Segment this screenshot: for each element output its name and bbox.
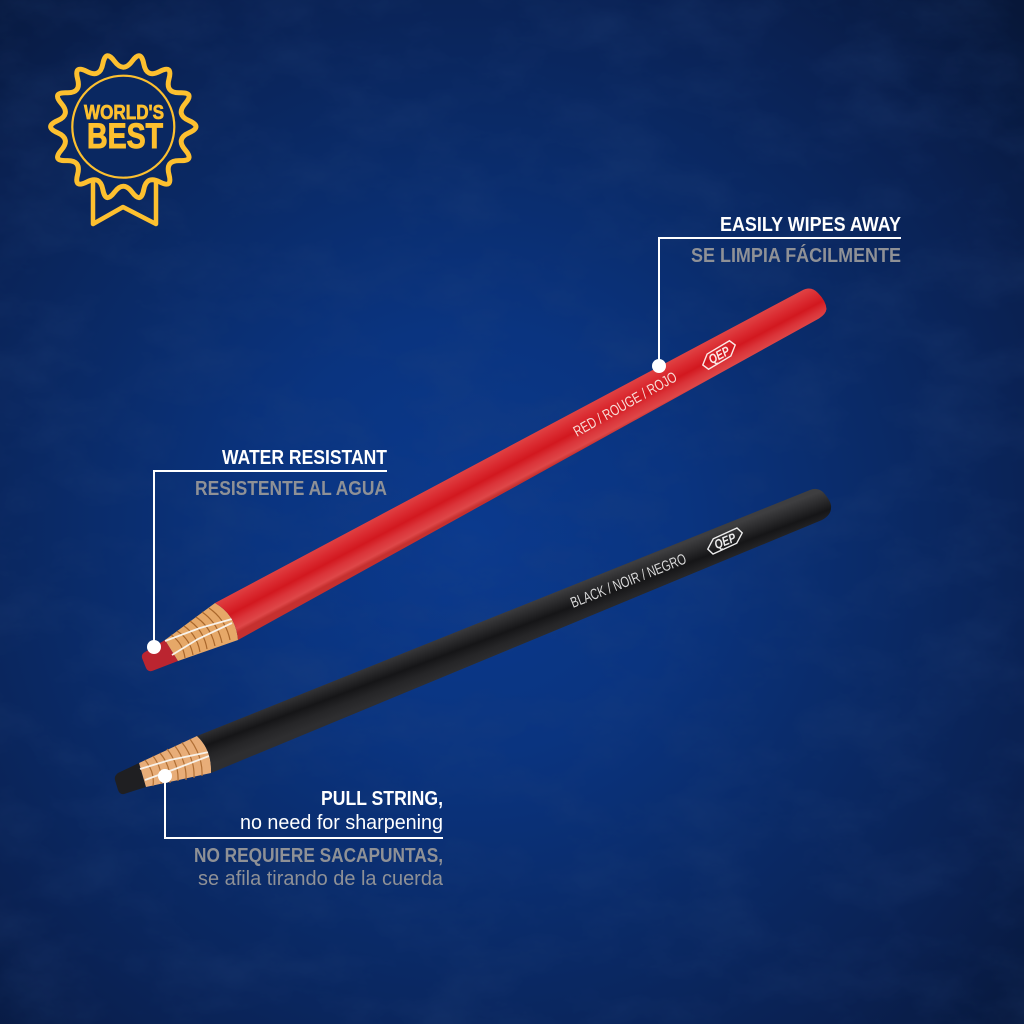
callout dot bbox=[158, 769, 172, 783]
callout subheading: no need for sharpening bbox=[240, 812, 443, 834]
callout leader bbox=[659, 238, 901, 366]
callout: water resistant bbox=[147, 446, 387, 654]
badge text: world's: WORLD'S bbox=[84, 102, 164, 124]
red body bbox=[215, 288, 826, 640]
black pencil label: BLACK / NOIR / NEGRO bbox=[568, 551, 689, 612]
callout heading: WATER RESISTANT bbox=[222, 446, 387, 469]
callout heading: PULL STRING, bbox=[321, 787, 443, 810]
pencil: black bbox=[115, 489, 831, 794]
badge ribbon bbox=[93, 178, 156, 224]
callout dot bbox=[652, 359, 666, 373]
black cone scallops bbox=[145, 739, 202, 786]
badge: world's best bbox=[51, 56, 196, 224]
black lead tip bbox=[115, 763, 146, 794]
callout spanish heading: NO REQUIERE SACAPUNTAS, bbox=[194, 844, 443, 867]
red cone scallops bbox=[171, 608, 230, 658]
black wrapped paper cone bbox=[139, 736, 211, 787]
black pull string bbox=[140, 752, 209, 780]
red wrapped paper cone bbox=[165, 603, 238, 661]
callout leader bbox=[154, 471, 387, 647]
badge inner circle bbox=[72, 76, 174, 178]
callout dot bbox=[147, 640, 161, 654]
pencil: red bbox=[142, 288, 827, 671]
callout: easily wipes away bbox=[652, 213, 901, 373]
callout spanish text: RESISTENTE AL AGUA bbox=[195, 477, 387, 500]
red QEP logo: QEP bbox=[706, 343, 732, 367]
badge starburst bbox=[51, 56, 196, 198]
callout leader bbox=[165, 776, 443, 838]
badge text: best: BEST bbox=[87, 117, 163, 156]
callout spanish text: SE LIMPIA FÁCILMENTE bbox=[691, 244, 901, 267]
red lead tip bbox=[142, 640, 178, 671]
black body bbox=[197, 489, 831, 773]
red QEP logo bbox=[699, 339, 739, 371]
callout: pull string bbox=[158, 769, 444, 890]
callout heading: EASILY WIPES AWAY bbox=[720, 213, 901, 236]
black QEP logo: QEP bbox=[712, 530, 738, 552]
callout spanish subheading: se afila tirando de la cuerda bbox=[198, 868, 444, 890]
red pull string bbox=[165, 619, 232, 655]
red pencil label: RED / ROUGE / ROJO bbox=[571, 369, 680, 440]
black QEP logo bbox=[705, 527, 745, 555]
